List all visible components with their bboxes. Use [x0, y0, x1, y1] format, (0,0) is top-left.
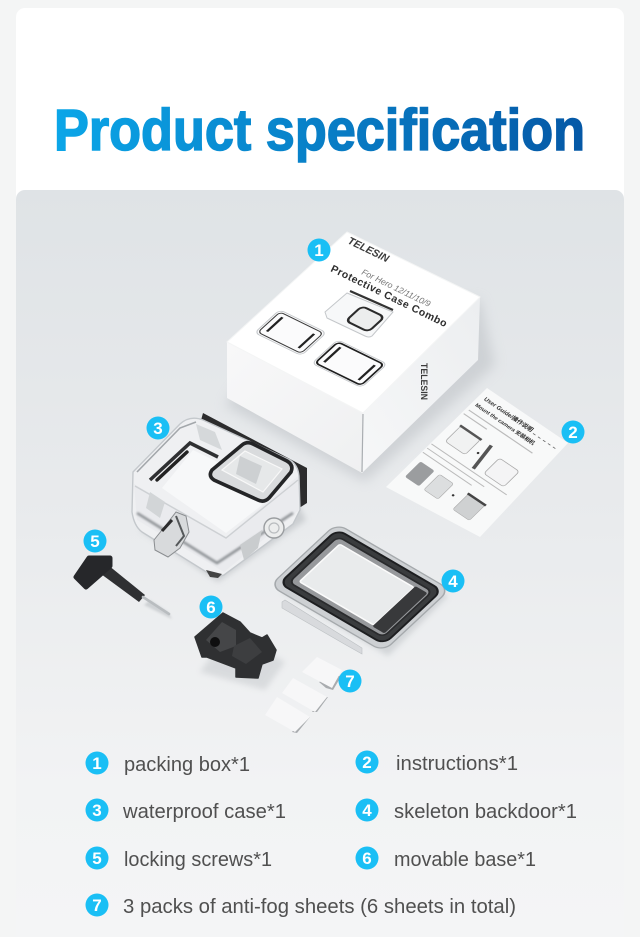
- legend: waterproof case: 3: [92, 801, 102, 820]
- callout 3: 3: [153, 419, 163, 438]
- sheet heading: User Guide/操作说明: [482, 396, 535, 433]
- box art: right frame: [312, 340, 387, 388]
- callout 7: [338, 670, 362, 692]
- callout 6: [200, 596, 222, 618]
- rear hinge: [200, 413, 307, 510]
- instructions sheet: [386, 388, 568, 537]
- packing box: [225, 232, 495, 482]
- panel: product photo and contents: [16, 190, 624, 937]
- backdoor shadow: [282, 535, 448, 656]
- legend: movable base: 6: [362, 849, 372, 868]
- skeleton backdoor: [270, 523, 450, 652]
- instructions sheet: Mount the camera 安装相机: [473, 401, 538, 447]
- backdoor dark band: [372, 586, 428, 633]
- callout 4: 4: [448, 572, 458, 591]
- latch: [154, 512, 189, 557]
- callout 7: 7: [345, 672, 355, 691]
- legend: packing box: [86, 752, 250, 776]
- backdoor clip: [282, 600, 362, 654]
- title: Product specification: [54, 98, 585, 163]
- callout 1: [308, 238, 330, 262]
- legend: skeleton backdoor: 4: [362, 801, 372, 820]
- box model text: For Hero 12/11/10/9: [360, 267, 433, 309]
- legend: locking screws: 5: [92, 849, 102, 868]
- backdoor window: [299, 544, 414, 625]
- waterproof case: [132, 413, 307, 582]
- case top left highlights: [137, 422, 196, 472]
- legend: locking screws: locking screws*1: [124, 849, 272, 871]
- movable base: [195, 613, 285, 690]
- legend: instructions: 2: [362, 753, 372, 772]
- callout 2: [562, 420, 584, 444]
- box art: case: [325, 291, 393, 337]
- callout 1: 1: [314, 241, 324, 260]
- legend: instructions: [356, 750, 518, 775]
- legend: movable base: movable base*1: [394, 849, 536, 871]
- header card: [16, 8, 624, 208]
- legend: anti-fog sheets: 3 packs of anti-fog sheets (6 sheets in total): [123, 896, 516, 918]
- side knob: [264, 518, 284, 538]
- callout 2: 2: [568, 423, 578, 442]
- callout 3: [146, 416, 170, 440]
- callout 4: [442, 570, 464, 592]
- legend: packing box: 1: [92, 754, 102, 773]
- box product name: Protective Case Combo: [329, 263, 449, 330]
- box side brand: TELESIN: [419, 363, 429, 400]
- anti-fog sheets: [265, 657, 342, 733]
- case body: [132, 418, 300, 576]
- callout 5: [84, 530, 106, 552]
- legend: waterproof case: waterproof case*1: [122, 801, 286, 823]
- window frame: [150, 443, 218, 480]
- callout 6: 6: [206, 598, 216, 617]
- legend: packing box: packing box*1: [124, 754, 250, 776]
- front band: [134, 476, 299, 572]
- lens frame: [210, 443, 292, 501]
- locking screw: [76, 558, 172, 619]
- window interior: [162, 450, 262, 533]
- legend: anti-fog sheets: 7: [92, 896, 102, 915]
- box art: left frame: [255, 310, 326, 356]
- legend: skeleton backdoor: skeleton backdoor*1: [394, 801, 577, 823]
- legend: instructions: instructions*1: [396, 753, 518, 775]
- box brand text: TELESIN: [346, 235, 391, 265]
- callout 5: 5: [90, 532, 100, 551]
